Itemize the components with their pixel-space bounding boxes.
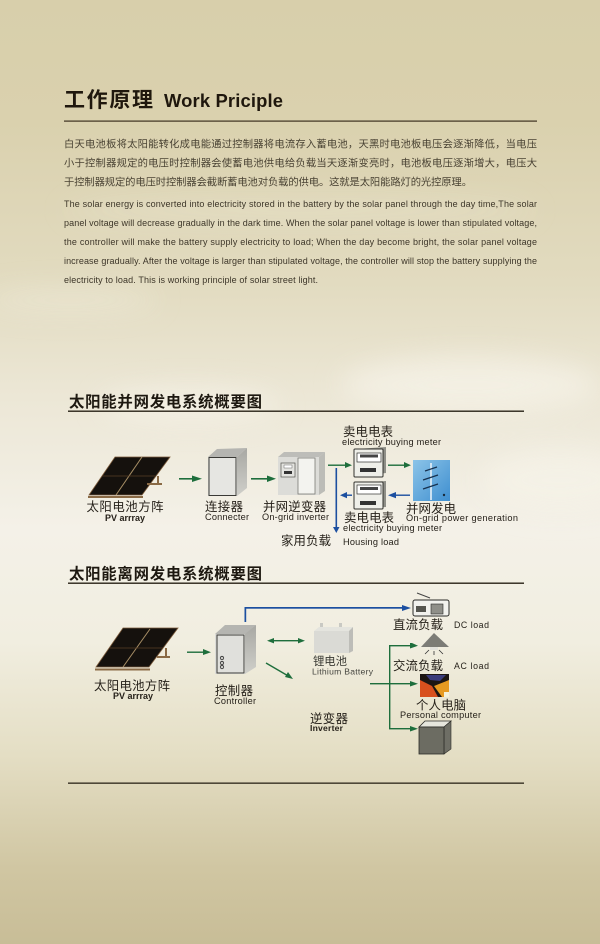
English paragraph: electricity to load. This is working principle of solar street light. (64, 275, 318, 285)
label: housing load: Housing load (343, 537, 399, 547)
label: housing load (281, 533, 399, 548)
label: meter bottom: 卖电电表 (344, 511, 394, 525)
label: connector (205, 499, 249, 522)
icon: battery (314, 623, 353, 653)
Chinese paragraph: 白天电池板将太阳能转化成电能通过控制器将电流存入蓄电池，天黑时电池板电压会逐渐降低，当电压 (64, 138, 537, 150)
label: PV array (94, 678, 170, 701)
arrow: to inverter (266, 663, 293, 679)
label: housing load: 家用负载 (281, 533, 331, 548)
label: PV array: PV arrray (105, 513, 145, 523)
English paragraph: panel voltage will decrease gradually in the dark time. When the solar panel voltage is lower than stipulated voltage, (64, 218, 537, 228)
label: PV array: PV arrray (113, 691, 153, 701)
label: AC load (393, 658, 489, 673)
label: on-grid generation: 并网发电 (406, 501, 456, 516)
label: on-grid inverter: 并网逆变器 (263, 499, 327, 514)
English paragraph (64, 199, 537, 285)
label: AC load: 交流负载 (393, 658, 443, 673)
Chinese paragraph (64, 138, 537, 188)
arrow: double controller battery (267, 638, 305, 643)
title (64, 89, 283, 112)
icon: computer screen (420, 674, 449, 697)
label: meter top: electricity buying meter (342, 437, 441, 447)
label: inverter: Inverter (310, 723, 344, 733)
icon: on-grid inverter (278, 452, 325, 495)
label: on-grid inverter: On-grid inverter (262, 512, 329, 522)
title: Work Priciple (164, 90, 283, 111)
arrow (179, 476, 202, 482)
icon: pylon (413, 460, 450, 501)
Chinese paragraph: 小于控制器规定的电压时控制器会使蓄电池供电给负载当天逐渐变亮时，电池板电压逐渐增大，电压大 (64, 156, 537, 170)
arrow: housing load (333, 468, 340, 533)
label: inverter: 逆变器 (310, 711, 349, 726)
arrow (388, 492, 410, 498)
icon: controller cabinet (215, 625, 256, 674)
panel: on-grid diagram (86, 425, 518, 548)
English paragraph: the controller will make the battery supply electricity to load; When the day become bright, the solar panel voltage (64, 237, 537, 247)
label: meter top (342, 425, 441, 447)
label: on-grid generation: On-grid power generation (406, 513, 518, 523)
icon: appliance box (419, 721, 451, 754)
heading: on-grid system: 太阳能并网发电系统概要图 (69, 392, 262, 411)
arrow: DC line (244, 605, 411, 622)
arrow (328, 462, 352, 468)
label: battery (312, 654, 374, 676)
label: meter top: 卖电电表 (343, 425, 393, 439)
arrows: AC branch (370, 643, 418, 732)
label: inverter (310, 711, 349, 733)
arrow (388, 462, 411, 468)
label: PV array (86, 499, 164, 523)
label: AC load: AC load (454, 661, 489, 671)
English paragraph: increase gradually. After the voltage is larger than stipulated voltage, the controller will stop the battery supplying the (64, 256, 537, 266)
label: PV array: 太阳电池方阵 (94, 678, 170, 693)
icon: meter top (354, 447, 386, 477)
label: personal computer: 个人电脑 (416, 698, 466, 712)
label: PV array: 太阳电池方阵 (86, 499, 164, 514)
arrow (187, 649, 211, 655)
icon: radio (413, 593, 449, 616)
icon: lamp (421, 633, 449, 655)
label: controller: 控制器 (215, 684, 254, 698)
label: connector: Connecter (205, 512, 249, 522)
label: meter bottom (343, 511, 442, 533)
label: meter bottom: electricity buying meter (343, 523, 442, 533)
label: battery: 锂电池 (313, 654, 347, 668)
icon: PV array (95, 628, 178, 670)
English paragraph: The solar energy is converted into electricity stored in the battery by the solar panel through the day time,The solar (64, 199, 537, 209)
icon: meter bottom (354, 481, 386, 509)
icon: connector cabinet (208, 448, 247, 496)
heading: off-grid system: 太阳能离网发电系统概要图 (69, 564, 262, 583)
label: on-grid generation (406, 501, 518, 523)
label: controller: Controller (214, 696, 256, 706)
title: 工作原理 (64, 89, 153, 112)
label: connector: 连接器 (205, 499, 244, 514)
label: DC load: 直流负载 (393, 618, 443, 632)
Chinese paragraph: 于控制器规定的电压时控制器会截断蓄电池对负载的供电。这就是太阳能路灯的光控原理。 (64, 176, 472, 188)
label: DC load (393, 618, 489, 632)
label: DC load: DC load (454, 620, 489, 630)
label: controller (214, 684, 256, 706)
label: personal computer (400, 698, 481, 720)
label: personal computer: Personal computer (400, 710, 481, 720)
label: battery: Lithium Battery (312, 666, 374, 676)
arrow (251, 476, 276, 482)
arrow (340, 492, 352, 498)
icon: PV array (88, 457, 170, 498)
panel: off-grid diagram (94, 593, 489, 754)
label: on-grid inverter (262, 499, 329, 522)
